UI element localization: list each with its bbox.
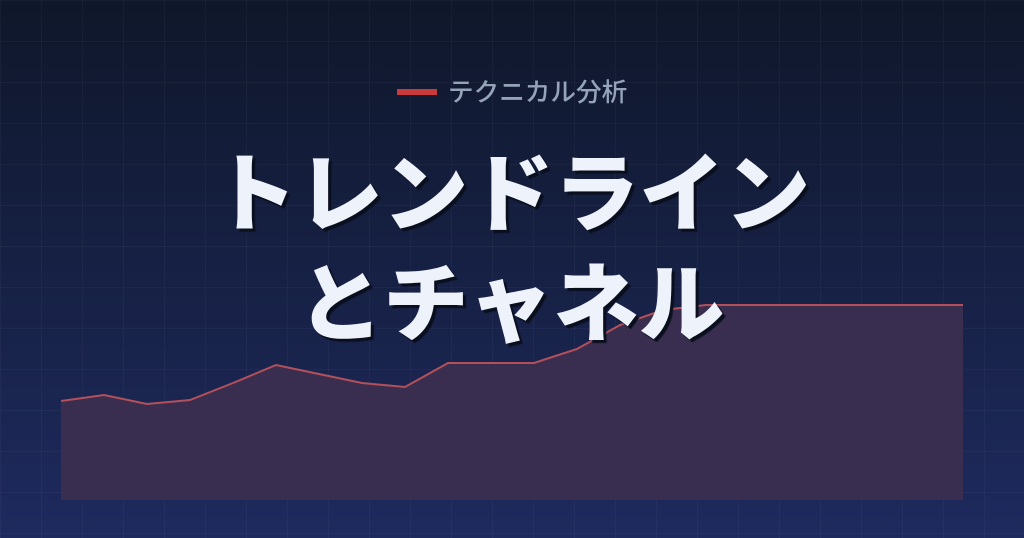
chart area fill xyxy=(61,305,963,500)
title: トレンドライン xyxy=(212,148,810,243)
red accent bar xyxy=(397,89,437,95)
title: とチャネル xyxy=(298,258,724,353)
title xyxy=(212,148,810,353)
chart trend line xyxy=(61,305,963,404)
eyebrow: category label xyxy=(397,79,627,107)
category text: テクニカル分析 xyxy=(448,79,627,107)
